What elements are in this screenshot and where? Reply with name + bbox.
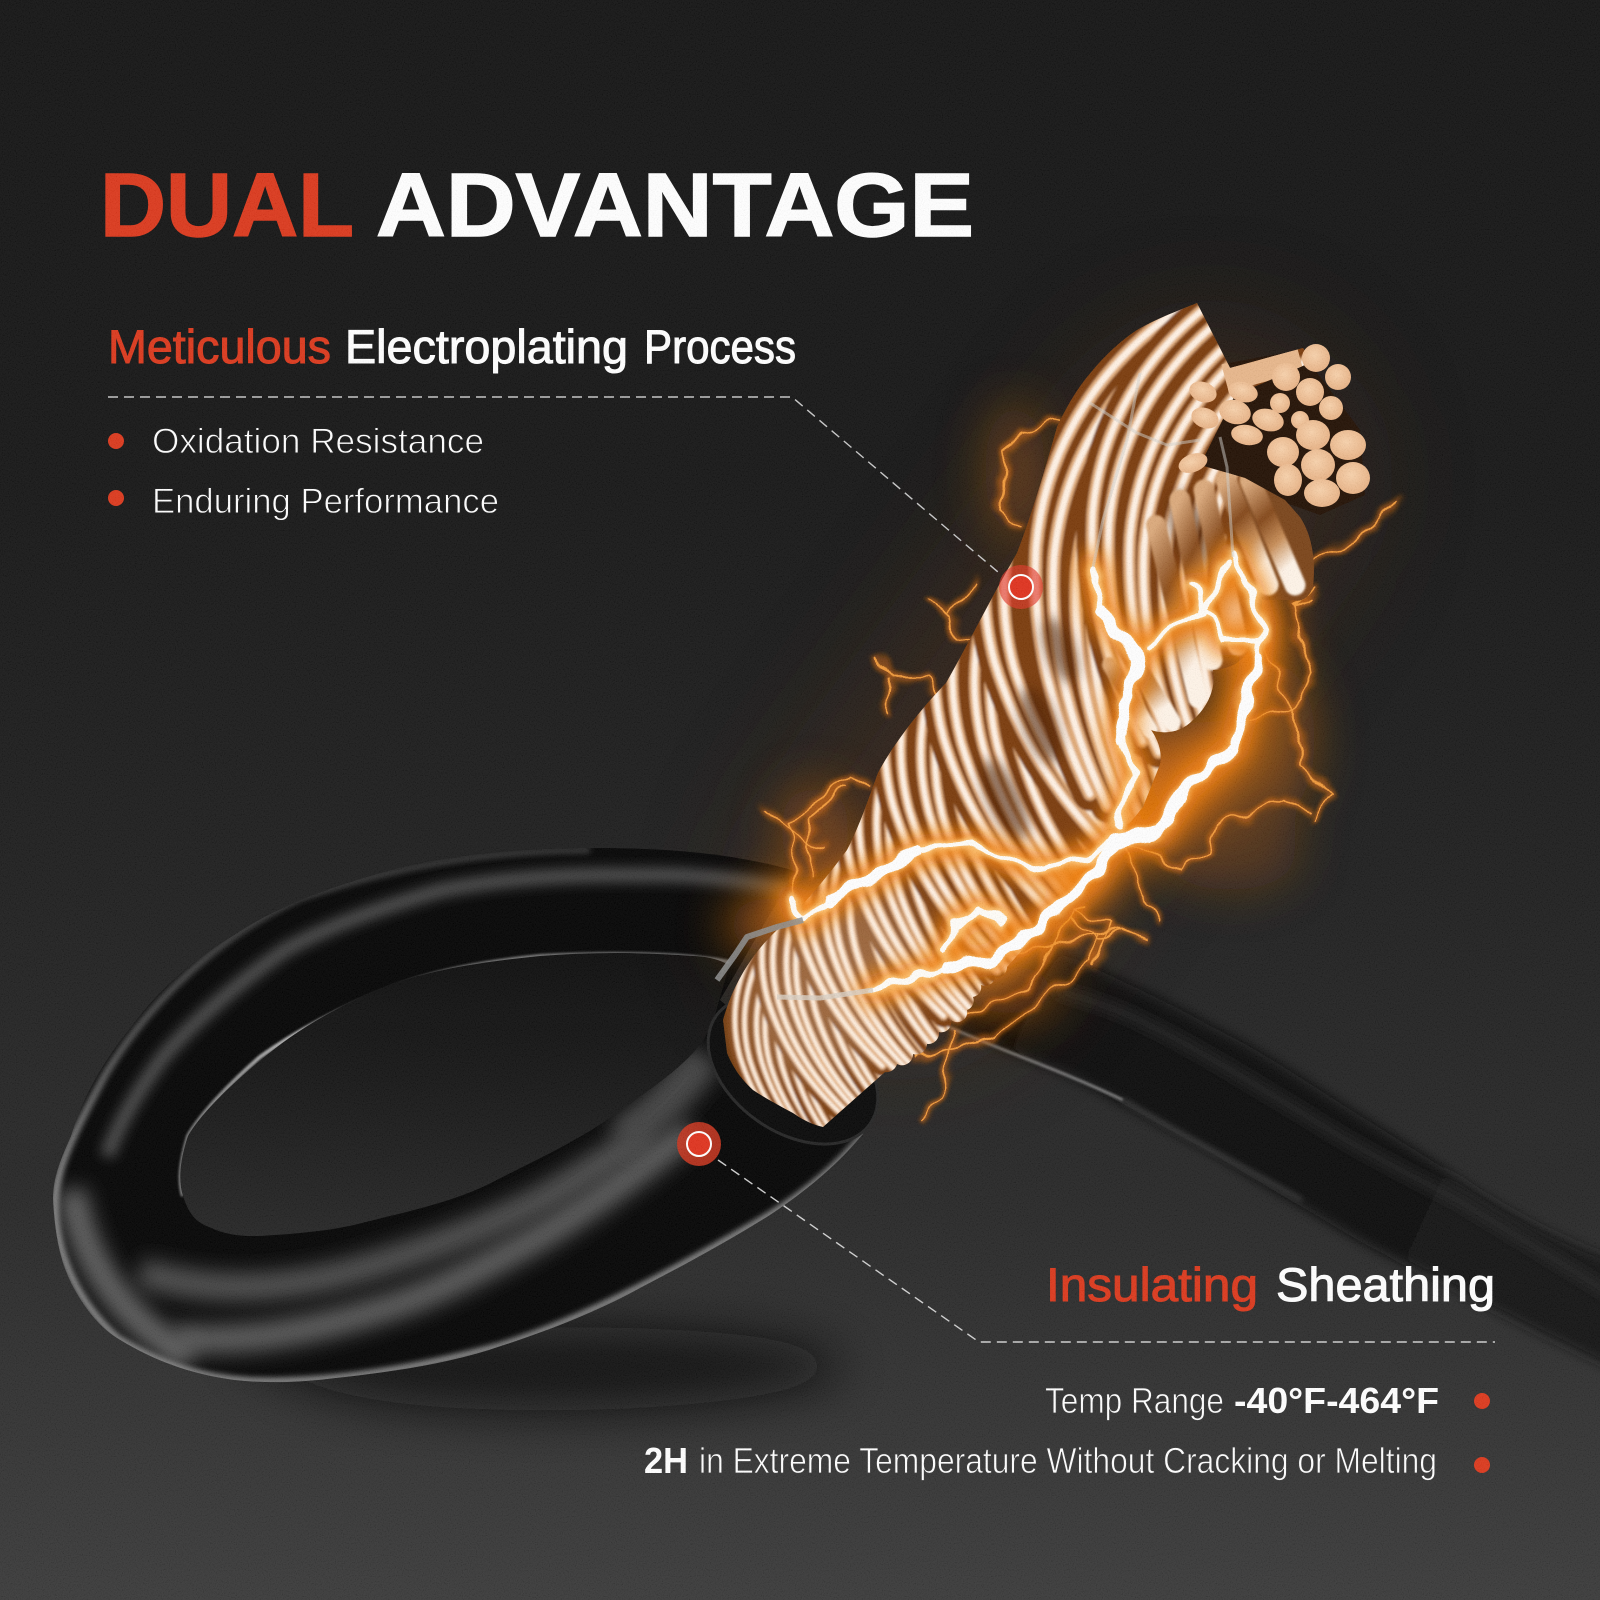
loop hole interior xyxy=(180,953,729,1236)
title: DUAL xyxy=(100,156,354,256)
thin lightning branches outside the copper xyxy=(764,420,1397,1120)
loop: lower tube highlight bands xyxy=(72,1055,705,1358)
heading: insulating sheathing: Insulating xyxy=(1046,1258,1258,1311)
copper: rounded strand lobes xyxy=(1110,480,1295,730)
cable loop floor shadow xyxy=(230,1327,841,1410)
heading: meticulous electroplating process: Electroplating xyxy=(345,320,628,373)
bullet: temp range xyxy=(1474,1393,1490,1409)
heading: meticulous electroplating process xyxy=(108,320,796,373)
marker pin: copper strands xyxy=(999,565,1043,609)
title xyxy=(100,156,974,256)
sheath mouth around copper xyxy=(680,965,906,1175)
loop: upper tube highlight band xyxy=(107,875,795,1156)
bullet: extreme temperature xyxy=(1474,1457,1490,1473)
bullet: oxidation resistance xyxy=(108,433,124,449)
copper: twisted strand combs xyxy=(728,303,1304,1127)
title: ADVANTAGE xyxy=(376,156,974,256)
heading: meticulous electroplating process: Process xyxy=(644,320,796,373)
text: extreme temperature: 2H xyxy=(644,1440,688,1481)
text: oxidation resistance: Oxidation Resistance xyxy=(152,422,484,461)
warm haze around the copper xyxy=(900,480,1210,900)
cable: back section running off to the right xyxy=(949,950,1600,1372)
bullet: enduring performance xyxy=(108,490,124,506)
callout leader: sheathing xyxy=(718,1160,1495,1342)
copper: bright sheen near sheath xyxy=(723,888,930,1098)
loop: inner rim light xyxy=(181,954,729,1196)
heading: insulating sheathing: Sheathing xyxy=(1276,1258,1495,1311)
copper: wire end cross-sections xyxy=(1176,344,1370,507)
callout leader: electroplating xyxy=(108,397,998,572)
copper: shadowed gaps between strands xyxy=(972,486,1221,847)
text: temp range: Temp Range xyxy=(1045,1380,1224,1421)
text: extreme temperature: in Extreme Temperature Without Cracking or Melting xyxy=(699,1440,1437,1481)
glow at sheath edges xyxy=(725,400,1315,1015)
loop: outer rim light xyxy=(55,850,870,1381)
text: temp range xyxy=(1045,1380,1439,1421)
list: copper benefits xyxy=(108,422,499,521)
text: enduring performance: Enduring Performance xyxy=(152,482,499,521)
main lightning bolts over copper xyxy=(717,373,1262,998)
heading: meticulous electroplating process: Meticulous xyxy=(108,320,331,373)
bare copper strand bundle xyxy=(723,303,1387,1127)
pale desaturated bolt ends xyxy=(717,920,803,980)
cable loop with sheath xyxy=(53,848,906,1382)
text: temp range: -40°F-464°F xyxy=(1234,1380,1439,1421)
list: sheath benefits xyxy=(644,1380,1490,1481)
copper: top bundle band xyxy=(1225,358,1300,378)
lightning glow behind copper xyxy=(792,557,1262,990)
heading: insulating sheathing xyxy=(1046,1258,1495,1311)
marker pin: sheath xyxy=(677,1122,721,1166)
